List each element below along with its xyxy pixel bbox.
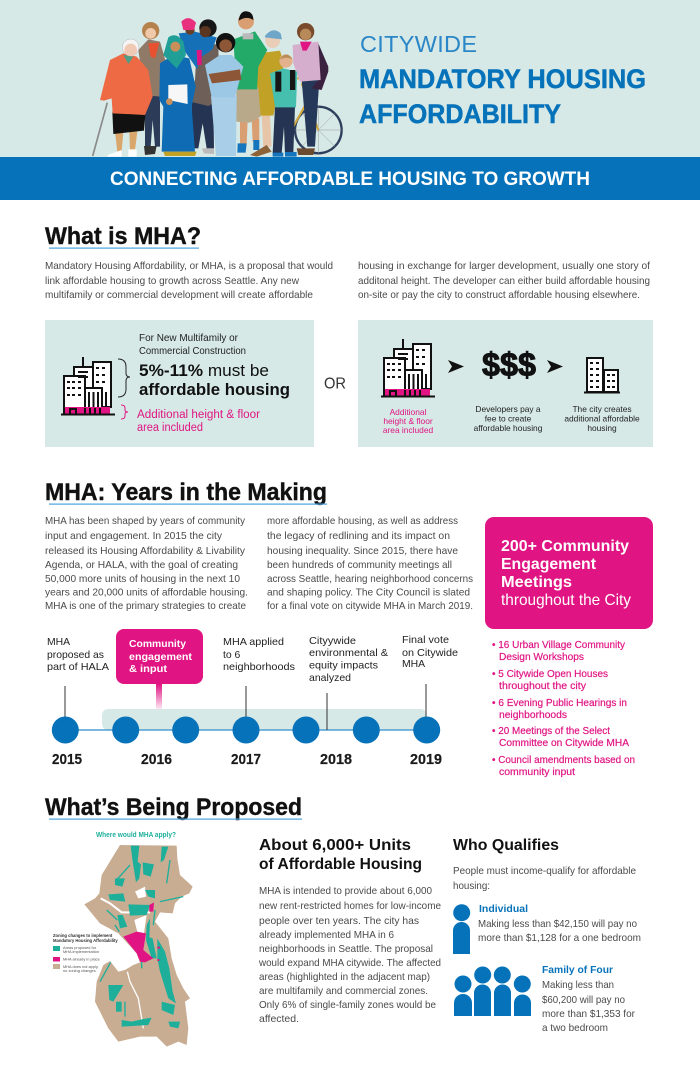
text block: history left column: input and engagement. In 2015 the city [45, 531, 223, 542]
panel: on-site option [45, 320, 314, 447]
person: man in green shirt [233, 11, 267, 153]
milestone: 2015: part of HALA [47, 662, 109, 673]
milestone: 2019: MHA [402, 659, 425, 670]
illustration: group of residents with bicycle [93, 11, 342, 157]
text block: units description: MHA is intended to provide about 6,000 [259, 886, 432, 897]
text block: units description: Only 6% of single-family zones would be [259, 1000, 436, 1011]
text block: history left column: MHA has been shaped by years of community [45, 516, 246, 527]
text block: history right column: and shaping policy. The City Council is slated [267, 588, 470, 598]
callout: 200+ community engagement meetings: 200+ Community [501, 538, 629, 555]
text: city creates caption: The city creates [572, 404, 632, 414]
title [359, 31, 646, 129]
icon: city buildings [61, 357, 115, 414]
subtitle banner: CONNECTING AFFORDABLE HOUSING TO GROWTH [110, 169, 590, 190]
text block: history left column: years and 20,000 units of affordable housing. [45, 588, 248, 598]
header background [0, 0, 700, 157]
text: developer fee caption: affordable housing [474, 423, 543, 433]
person: nurse in blue scrubs [205, 33, 243, 156]
text block: units description [258, 886, 441, 1025]
text: OR: OR [324, 376, 346, 392]
text block: family of four: $60,200 will pay no [542, 995, 625, 1006]
panel: fee option [358, 320, 653, 447]
text block: history right column [267, 516, 473, 612]
text: developer fee caption: fee to create [485, 414, 532, 424]
milestone: 2017: MHA applied [223, 637, 284, 648]
arrow: to fee [448, 360, 464, 373]
list: meeting types: • 5 Citywide Open Houses [492, 669, 608, 680]
year labels: 2019 [410, 752, 442, 768]
heading: About 6,000+ units [259, 837, 422, 873]
callout: 200+ community engagement meetings [485, 517, 653, 629]
map legend: Areas proposed for [63, 945, 97, 950]
list: meeting types: • 16 Urban Village Community [492, 640, 626, 651]
map landmass [84, 845, 193, 1047]
text: additional height and floor area: Additional height & floor [137, 409, 260, 421]
milestone: 2015 [47, 637, 109, 673]
bracket: additional height [121, 405, 128, 419]
text: additional height and floor area [137, 409, 260, 434]
list: meeting types: Committee on Citywide MHA [499, 738, 629, 749]
callout: 200+ community engagement meetings: Meetings [501, 574, 572, 591]
milestone: 2018 [309, 636, 388, 684]
text block: income qualify: People must income-qualify for affordable [453, 866, 636, 877]
text block: units description: already implemented MHA in 6 [259, 930, 394, 941]
milestone: 2019: Final vote [402, 635, 449, 646]
callout: 200+ community engagement meetings: throughout the City [501, 592, 631, 609]
text block: units description: neighborhoods in Seattle. The proposal [259, 944, 433, 955]
text block: MHA definition right column: housing in exchange for larger development, usually one story of [358, 261, 650, 272]
map: MHA already in place [123, 902, 160, 962]
title: AFFORDABILITY [359, 99, 561, 129]
text block: income qualify: housing: [453, 881, 490, 892]
text: construction label: Commercial Construction [139, 346, 246, 357]
year labels: 2015 [52, 752, 82, 768]
map: Seattle zoning [84, 845, 193, 1047]
text block: family of four: Making less than [542, 980, 614, 991]
map legend: MHA already in place [63, 956, 100, 962]
icon: affordable housing building [584, 358, 620, 392]
text: developer fee caption: Developers pay a [475, 404, 541, 414]
map: areas proposed for MHA [100, 846, 183, 1028]
list: meeting types: throughout the city [499, 681, 587, 692]
icon: individual person [453, 904, 470, 954]
text block: MHA definition left column: Mandatory Housing Affordability, or MHA, is a proposal that would [45, 261, 333, 272]
text: construction label [139, 333, 246, 357]
text block: history right column: for a final vote on citywide MHA in March 2019. [267, 601, 473, 612]
timeline dots [52, 716, 440, 744]
map legend: Zoning changes to implement [53, 933, 113, 938]
text: 5%-11% must be affordable housing [139, 362, 290, 399]
text block: individual: Making less than $42,150 will pay no [478, 919, 637, 930]
text block: family of four: more than $1,353 for [542, 1009, 636, 1020]
milestone: 2019 [402, 635, 458, 670]
milestone: 2017 [223, 637, 295, 673]
milestone: 2015: proposed as [47, 650, 104, 661]
text block: family of four [542, 964, 636, 1034]
text: additional height caption: area included [383, 425, 433, 435]
text block: family of four: a two bedroom [542, 1023, 608, 1034]
map water [101, 887, 175, 1028]
connector lines [65, 684, 426, 730]
year labels: 2016 [141, 752, 172, 768]
map legend: Mandatory Housing Affordability [53, 938, 118, 943]
list: meeting types: • 20 Meetings of the Select [492, 726, 610, 737]
list: meeting types: community input [499, 767, 575, 778]
milestone: 2018: analyzed [309, 673, 351, 684]
person: young man in jacket [138, 22, 167, 155]
text block: history left column: MHA is one of the primary strategies to create [45, 601, 246, 612]
timeline axis [65, 729, 427, 731]
milestone: 2015: MHA [47, 637, 70, 648]
engagement callout: Community [129, 638, 186, 650]
engagement callout [116, 629, 203, 684]
text block: MHA definition left column: link affordable housing to growth across Seattle. Any new [45, 276, 299, 287]
text block: history right column: housing inequality. Since 2015, there have [267, 546, 458, 557]
list: meeting types [492, 640, 635, 778]
milestone: 2019: on Citywide [402, 648, 458, 659]
icon: dollar signs: $$$ [482, 346, 536, 383]
map legend: MHA implementation [63, 949, 99, 954]
list: meeting types: • Council amendments based on [492, 755, 635, 766]
title: MANDATORY HOUSING [359, 64, 646, 94]
milestone: 2018: environmental & [309, 648, 388, 659]
text block: MHA definition left column: multifamily or commercial development will create affordable [45, 290, 313, 301]
text block: MHA definition right column: on-site or pay the city to construct affordable housing elsewhere. [358, 290, 640, 301]
list: meeting types: neighborhoods [499, 710, 567, 721]
text block: units description: people over ten years. The city has [259, 916, 419, 927]
person: elder woman in orange coat [93, 39, 153, 157]
text block: history right column: across Seattle, hearing neighborhood concerns [267, 574, 473, 585]
text block: history left column: 50,000 more units of housing in the next 10 [45, 574, 240, 585]
year labels [52, 752, 442, 768]
heading: About 6,000+ units: About 6,000+ Units [259, 837, 411, 854]
milestone: 2017: neighborhoods [223, 662, 295, 673]
year labels: 2018 [320, 752, 352, 768]
text block: MHA definition right column: additonal height. The developer can either build affordable housing [358, 276, 650, 287]
text: city creates caption: additional affordable [564, 414, 640, 424]
heading: Who Qualifies: Who Qualifies [453, 837, 559, 854]
engagement callout: engagement [129, 651, 192, 663]
map legend [53, 933, 118, 973]
arrow: to city housing [547, 360, 563, 373]
person: man with scarf and child [179, 18, 219, 154]
text block: individual: more than $1,128 for a one bedroom [478, 933, 641, 944]
callout: 200+ community engagement meetings: Engagement [501, 556, 597, 573]
timeline [47, 629, 458, 768]
engagement callout stem [156, 684, 162, 709]
map legend: no zoning changes [63, 968, 96, 973]
text block: history left column: released its Housing Affordability & Livability [45, 546, 246, 557]
text block: history left column [45, 516, 248, 612]
text block: units description: affected. [259, 1014, 299, 1025]
text: 5%-11% must be affordable housing: 5%-11% must be [139, 362, 269, 380]
icon: city buildings [381, 339, 435, 396]
person: child with backpack [270, 54, 297, 157]
text: additional height caption: Additional [390, 407, 427, 417]
text block: income qualify [453, 866, 636, 892]
text block: MHA definition left column [45, 261, 333, 301]
bracket: affordable portion [118, 359, 130, 397]
text block: history left column: Agenda, or HALA, with the goal of creating [45, 560, 238, 571]
text: city creates caption [564, 404, 640, 433]
text: city creates caption: housing [587, 423, 617, 433]
subtitle banner [0, 157, 700, 200]
text block: units description: would expand MHA citywide. The affected [258, 958, 441, 969]
heading: MHA Years in the Making: MHA: Years in the Making [45, 479, 327, 506]
year labels: 2017 [231, 752, 261, 768]
icon: family of four [454, 966, 531, 1016]
text block: MHA definition right column [358, 261, 650, 301]
text block: family of four: Family of Four [542, 964, 613, 976]
person: woman in blue robe and hijab [159, 35, 197, 156]
person: bicycle [293, 78, 342, 153]
text block: history right column: the legacy of redlining and its impact on [267, 531, 450, 542]
map legend: MHA does not apply, [63, 964, 99, 969]
heading: What is MHA?: What is MHA? [45, 223, 201, 250]
heading: About 6,000+ units: of Affordable Housing [259, 856, 422, 873]
engagement callout: & input [129, 663, 168, 675]
person: woman in lilac vest [293, 23, 328, 155]
text block: individual [478, 903, 641, 944]
list: meeting types: • 6 Evening Public Hearings in [492, 698, 627, 709]
engagement period band [102, 709, 426, 730]
text: additional height caption: height & floor [383, 416, 433, 426]
heading: What's Being Proposed: What’s Being Proposed [45, 794, 302, 821]
milestone: 2017: to 6 [223, 650, 241, 661]
text: additional height caption [383, 407, 433, 435]
text: 5%-11% must be affordable housing: affordable housing [139, 381, 290, 399]
milestone: 2018: Cityywide [309, 636, 356, 647]
text block: history right column: been hundreds of community meetings all [267, 560, 452, 571]
text block: units description: are multifamily and commercial zones. [259, 986, 428, 997]
text block: units description: areas (highlighted in the adjacent map) [259, 972, 430, 983]
title: CITYWIDE [360, 31, 477, 57]
milestone: 2018: equity impacts [309, 660, 378, 672]
map title: Where would MHA apply? [96, 830, 176, 839]
list: meeting types: Design Workshops [499, 652, 584, 663]
text block: units description: new rent-restricted homes for low-income [259, 901, 441, 912]
text: developer fee caption [474, 404, 543, 433]
person: woman in yellow dress [250, 30, 284, 157]
text: construction label: For New Multifamily or [139, 333, 239, 344]
text: additional height and floor area: area included [137, 422, 203, 434]
text block: history right column: more affordable housing, as well as address [267, 516, 458, 527]
text block: individual: Individual [479, 903, 528, 915]
